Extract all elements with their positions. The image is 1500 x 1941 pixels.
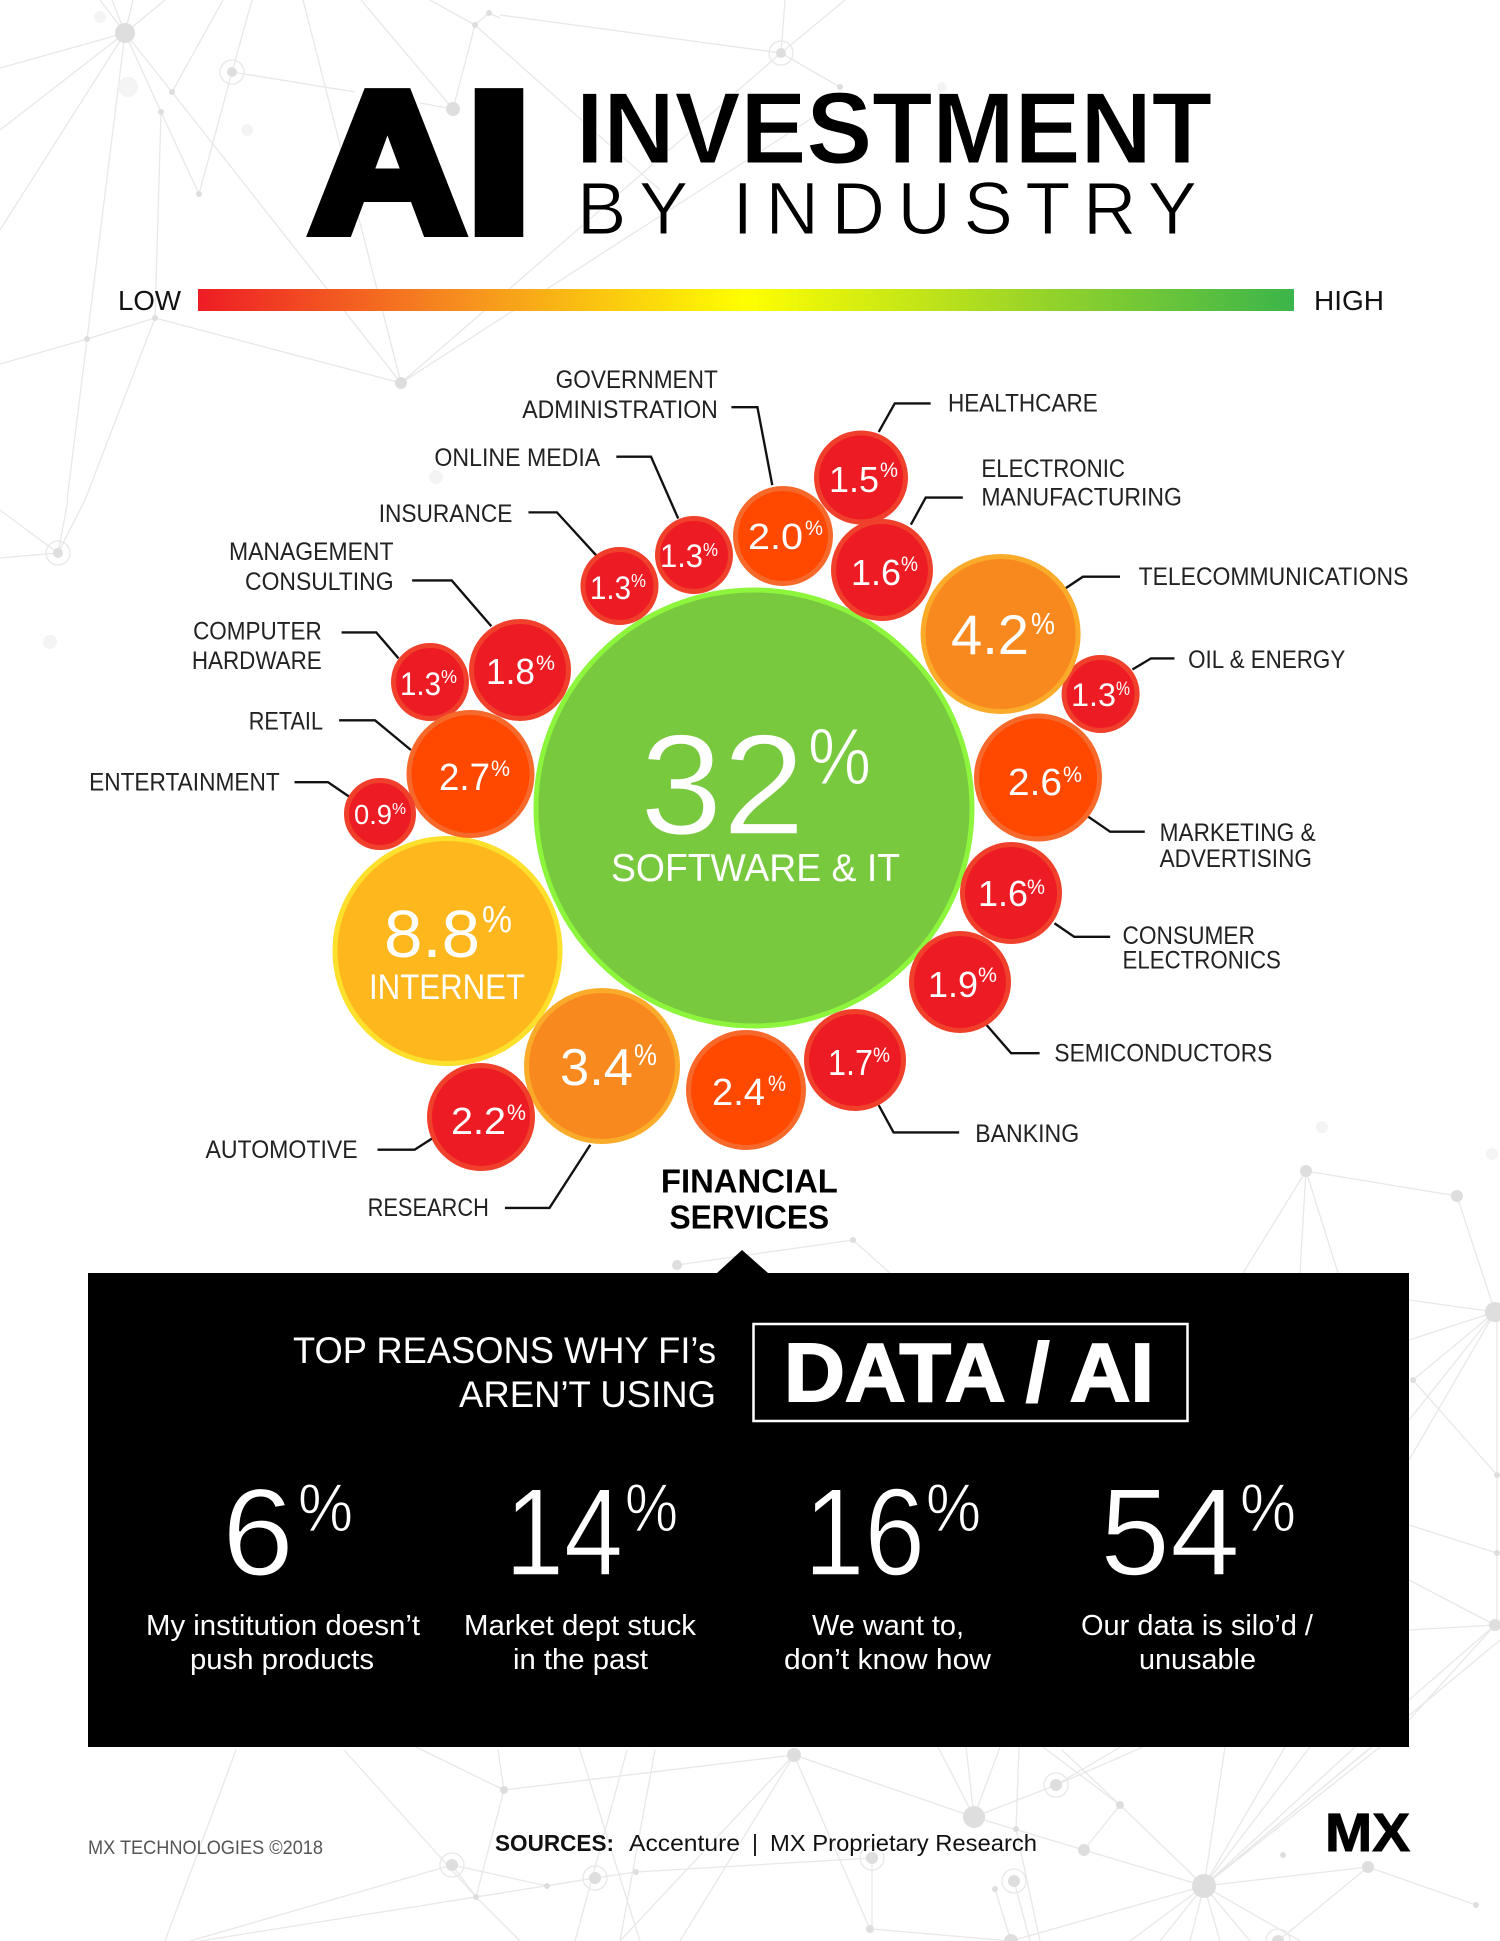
bubble: semiconductors 1.9%: 1.9: [928, 964, 978, 1005]
bubble: insurance 1.3%: 1.3: [590, 570, 631, 606]
bubble: internet 8.8%: INTERNET: [369, 968, 525, 1007]
bubble: marketing and advertising 2.6%: [976, 716, 1100, 839]
panel heading: AREN’T USING: [459, 1374, 716, 1415]
bubble: online media 1.3%: [658, 518, 730, 592]
bubble: management consulting 1.8%: [472, 622, 568, 718]
data / AI callout box: DATA / AI: [784, 1326, 1154, 1419]
sources: SOURCES:: [495, 1830, 614, 1856]
bubble: software and IT 32%: %: [808, 712, 871, 801]
sources: [495, 1830, 1037, 1856]
bubble: semiconductors 1.9%: [912, 934, 1008, 1030]
label: consumer electronics: ELECTRONICS: [1123, 948, 1281, 975]
label: consumer electronics: [1123, 923, 1281, 975]
stat: 14%: Market dept stuck: [464, 1610, 697, 1642]
label: financial services: FINANCIAL: [661, 1164, 838, 1201]
label: banking: BANKING: [975, 1121, 1079, 1148]
label: electronic manufacturing: [981, 456, 1182, 512]
panel heading: [293, 1330, 716, 1415]
stat: 54%: %: [1240, 1470, 1296, 1546]
bubble: oil and energy 1.3%: %: [1116, 679, 1130, 700]
bubble: automotive 2.2%: %: [507, 1100, 526, 1125]
stat: 6%: 6: [222, 1464, 294, 1602]
bubble: financial services 2.4%: %: [768, 1071, 786, 1096]
footer: [88, 1803, 1410, 1863]
stat: 54%: unusable: [1139, 1644, 1256, 1676]
panel heading: TOP REASONS WHY FI’s: [293, 1330, 716, 1371]
bubble: semiconductors 1.9%: %: [978, 964, 997, 987]
label: electronic manufacturing: ELECTRONIC: [981, 456, 1125, 483]
label: computer hardware: [192, 618, 322, 675]
leader lines: [295, 403, 1174, 1208]
label: marketing and advertising: [1160, 820, 1316, 873]
bubble: research 3.4%: [526, 990, 678, 1142]
title line: BY INDUSTRY: BY INDUSTRY: [577, 167, 1197, 250]
bubble: software and IT 32%: SOFTWARE & IT: [611, 847, 900, 890]
label: automotive: AUTOMOTIVE: [205, 1137, 358, 1164]
bubble: internet 8.8%: 8.8: [384, 897, 480, 972]
bubble: software and IT 32%: [536, 590, 972, 1026]
label: management consulting: MANAGEMENT: [229, 539, 394, 566]
bubble: oil and energy 1.3%: 1.3: [1071, 677, 1116, 713]
bubble: healthcare 1.5%: 1.5: [829, 459, 879, 500]
bubble: automotive 2.2%: 2.2: [451, 1101, 506, 1143]
label: research: RESEARCH: [368, 1195, 489, 1222]
bubble: computer hardware 1.3%: [394, 646, 466, 718]
bubble: management consulting 1.8%: 1.8: [486, 651, 535, 692]
stat: 6%: My institution doesn’t: [146, 1610, 420, 1642]
bubble: healthcare 1.5%: [816, 433, 906, 522]
label: government administration: GOVERNMENT: [556, 367, 718, 394]
bubble: financial services 2.4%: [688, 1032, 804, 1148]
label: financial services: [661, 1164, 838, 1236]
stat: 16%: %: [926, 1470, 981, 1546]
label: oil and energy: OIL & ENERGY: [1188, 647, 1345, 674]
bubble: retail 2.7%: %: [491, 756, 510, 781]
bubble: telecommunications 4.2%: 4.2: [951, 603, 1029, 666]
title word: AI: I: [466, 52, 532, 274]
stat: 16%: We want to,: [812, 1610, 964, 1642]
bubble: computer hardware 1.3%: 1.3: [400, 666, 441, 702]
bubble: online media 1.3%: 1.3: [660, 538, 703, 574]
panel background with pointer: [88, 1250, 1409, 1747]
bubble: research 3.4%: 3.4: [560, 1039, 633, 1097]
label: management consulting: CONSULTING: [245, 569, 394, 596]
copyright: MX TECHNOLOGIES ©2018: [88, 1838, 323, 1859]
bubble: retail 2.7%: [409, 712, 532, 836]
bubble: software and IT 32%: 32: [640, 706, 805, 865]
stat: 54%: [1081, 1464, 1314, 1676]
label: computer hardware: HARDWARE: [192, 648, 322, 675]
bubble: computer hardware 1.3%: %: [441, 667, 457, 687]
bubble: electronic manufacturing 1.6%: [834, 522, 930, 618]
bubble: banking 1.7%: [806, 1012, 904, 1108]
bubble: marketing and advertising 2.6%: %: [1063, 762, 1082, 787]
stat: 16%: don’t know how: [784, 1644, 992, 1676]
stat: 54%: 54: [1100, 1464, 1240, 1602]
icon: MX logo: MX: [1325, 1803, 1410, 1863]
bubble: banking 1.7%: %: [873, 1044, 890, 1067]
stat: 14%: %: [625, 1470, 678, 1546]
label: consumer electronics: CONSUMER: [1123, 923, 1255, 950]
stat: 6%: %: [298, 1470, 353, 1546]
sources: MX Proprietary Research: [770, 1830, 1037, 1856]
title: [310, 52, 1212, 274]
bubble: banking 1.7%: 1.7: [828, 1042, 873, 1083]
bubble: insurance 1.3%: [583, 550, 656, 622]
bubble: entertainment 0.9%: %: [392, 801, 406, 818]
bubble: marketing and advertising 2.6%: 2.6: [1008, 762, 1062, 804]
label: online media: ONLINE MEDIA: [434, 445, 601, 472]
stat: 16%: 16: [804, 1464, 925, 1602]
sources: Accenture: [629, 1830, 740, 1856]
low to high legend: [118, 285, 1384, 316]
bubble: financial services 2.4%: 2.4: [712, 1072, 765, 1114]
bubble: retail 2.7%: 2.7: [439, 757, 490, 799]
bubble: telecommunications 4.2%: %: [1031, 606, 1055, 641]
bubble: entertainment 0.9%: [346, 780, 414, 848]
bubble: government administration 2.0%: %: [805, 517, 823, 540]
legend low label: LOW: [118, 285, 182, 316]
bubble: telecommunications 4.2%: [923, 556, 1078, 712]
label: insurance: INSURANCE: [379, 501, 512, 528]
bubble: entertainment 0.9%: 0.9: [354, 799, 392, 830]
bubble: healthcare 1.5%: %: [880, 459, 898, 482]
stat: 6%: push products: [190, 1644, 374, 1676]
bubble: internet 8.8%: %: [482, 899, 512, 941]
label: financial services: SERVICES: [670, 1199, 829, 1236]
stat: 14%: [464, 1464, 697, 1676]
panel: top reasons: [88, 1250, 1409, 1747]
bubble: management consulting 1.8%: %: [536, 652, 555, 675]
bubble: government administration 2.0%: 2.0: [748, 516, 803, 557]
label: marketing and advertising: MARKETING &: [1160, 820, 1316, 847]
bubble: electronic manufacturing 1.6%: %: [901, 553, 918, 576]
label: computer hardware: COMPUTER: [193, 618, 322, 645]
industry labels: [89, 367, 1408, 1236]
stat: 14%: 14: [505, 1464, 623, 1602]
bubble: consumer electronics 1.6%: [962, 844, 1060, 942]
title word: AI: A: [310, 52, 465, 274]
stat: 16%: [784, 1464, 992, 1676]
label: electronic manufacturing: MANUFACTURING: [981, 485, 1182, 512]
stat: 54%: Our data is silo’d /: [1081, 1610, 1314, 1642]
bubble: electronic manufacturing 1.6%: 1.6: [851, 552, 901, 593]
stat: 14%: in the past: [513, 1644, 648, 1676]
bubble: consumer electronics 1.6%: %: [1027, 876, 1045, 899]
bubble: insurance 1.3%: %: [631, 571, 646, 591]
legend high label: HIGH: [1314, 285, 1384, 316]
sources: |: [752, 1830, 758, 1856]
label: management consulting: [229, 539, 394, 596]
label: entertainment: ENTERTAINMENT: [89, 769, 280, 796]
label: government administration: ADMINISTRATION: [522, 397, 718, 424]
label: telecommunications: TELECOMMUNICATIONS: [1139, 564, 1408, 591]
bubble: government administration 2.0%: [736, 488, 830, 584]
bubble: automotive 2.2%: [430, 1066, 532, 1168]
label: government administration: [522, 367, 718, 424]
legend gradient bar: [198, 289, 1294, 311]
label: semiconductors: SEMICONDUCTORS: [1054, 1040, 1272, 1067]
stat: 6%: [146, 1464, 420, 1676]
bubble: internet 8.8%: [335, 838, 560, 1064]
label: marketing and advertising: ADVERTISING: [1160, 846, 1312, 873]
bubble: consumer electronics 1.6%: 1.6: [978, 873, 1028, 914]
title line: INVESTMENT: INVESTMENT: [576, 73, 1212, 185]
bubble: research 3.4%: %: [634, 1039, 657, 1072]
bubble: oil and energy 1.3%: [1064, 658, 1137, 730]
label: healthcare: HEALTHCARE: [948, 391, 1098, 418]
title word: AI: [310, 52, 532, 274]
bubble: online media 1.3%: %: [703, 540, 718, 560]
bubble chart: [335, 433, 1137, 1168]
label: retail: RETAIL: [249, 709, 323, 736]
